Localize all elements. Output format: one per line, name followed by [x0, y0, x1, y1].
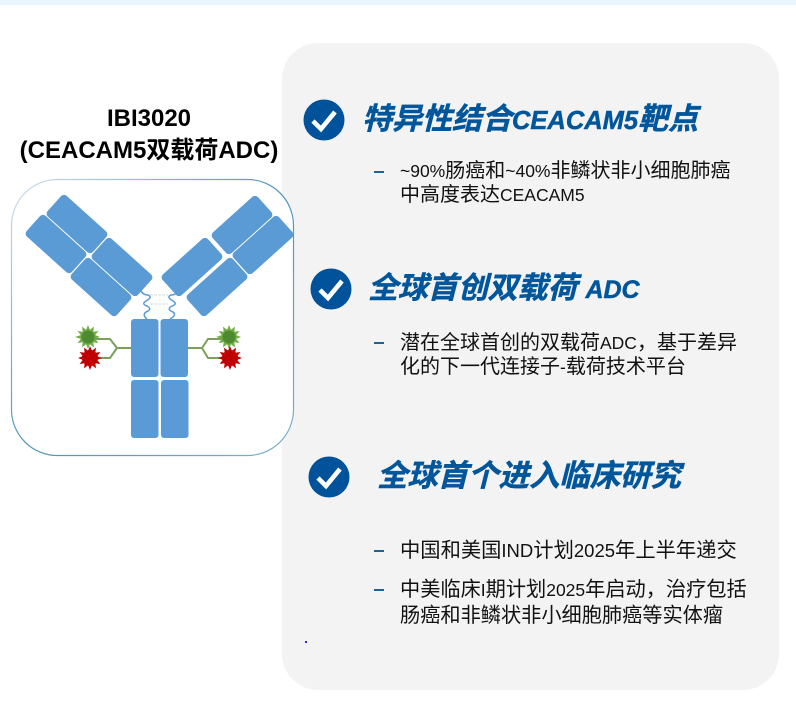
icon: check 1 — [304, 100, 344, 140]
heading: target: 特异性结合CEACAM5靶点 — [362, 103, 698, 136]
heading: first in clinic: 全球首个进入临床研究 — [377, 459, 681, 493]
heading: first-in-class: 全球首创双载荷 ADC — [368, 272, 639, 305]
panel: key points — [282, 43, 779, 690]
text: phase I plan: 中美临床I期计划2025年启动，治疗包括 — [400, 579, 747, 601]
text: target detail — [400, 160, 730, 206]
text: IND plan: 中国和美国IND计划2025年上半年递交 — [400, 540, 737, 562]
payload: left red — [78, 346, 102, 370]
stem — [131, 319, 188, 438]
payload: left green — [75, 325, 100, 349]
heading: drug name: IBI3020 — [107, 105, 191, 132]
dash 4 — [374, 589, 384, 591]
hinge — [141, 291, 178, 319]
text: target detail: ~90%肠癌和~40%非鳞状非小细胞肺癌 — [400, 160, 730, 182]
top stripe — [0, 0, 796, 5]
linkers — [95, 339, 224, 358]
antibody frame — [12, 180, 294, 456]
heading: drug name — [20, 105, 278, 164]
right arm — [160, 194, 295, 318]
payload: right red — [218, 346, 242, 370]
dash 2 — [374, 342, 384, 344]
text: first-in-class detail: 化的下一代连接子-载荷技术平台 — [400, 356, 686, 378]
dot mark — [305, 641, 307, 643]
chart: antibody diagram — [10, 178, 294, 456]
icon: check 2 — [310, 268, 352, 310]
left arm — [24, 193, 154, 318]
dash 3 — [374, 550, 384, 552]
payload: right green — [216, 325, 241, 349]
text: phase I plan: 肠癌和非鳞状非小细胞肺癌等实体瘤 — [400, 605, 723, 627]
text: first-in-class detail — [400, 332, 737, 378]
heading: drug name: (CEACAM5双载荷ADC) — [20, 137, 278, 164]
text: target detail: 中高度表达CEACAM5 — [400, 184, 585, 206]
text: phase I plan — [400, 578, 747, 627]
dash 1 — [374, 171, 384, 173]
icon: check 3 — [308, 456, 350, 498]
text: first-in-class detail: 潜在全球首创的双载荷ADC，基于差异 — [400, 332, 737, 354]
